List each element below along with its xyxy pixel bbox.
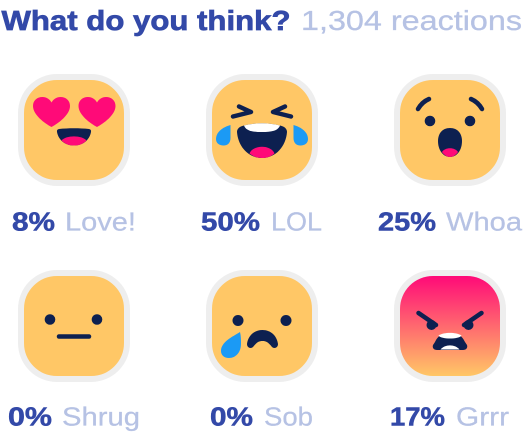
label: grrr (390, 402, 509, 432)
label: love (12, 206, 136, 236)
label: sob: Sob (264, 402, 313, 432)
label: love: 8% (12, 206, 55, 236)
icon: whoa face (397, 77, 503, 183)
panel: sob (209, 273, 315, 432)
label: love: Love! (65, 206, 136, 236)
icon: lol face (209, 77, 315, 183)
label: shrug: 0% (8, 402, 52, 432)
title: 1,304 reactions (301, 5, 522, 36)
label: whoa: Whoa (446, 206, 523, 236)
label: grrr: 17% (390, 402, 445, 432)
label: sob (210, 402, 313, 432)
label: whoa (378, 206, 523, 236)
panel: whoa (378, 77, 523, 236)
label: lol: LOL (271, 206, 322, 236)
label: whoa: 25% (378, 206, 436, 236)
icon: love face (21, 77, 127, 183)
label: shrug: Shrug (62, 402, 140, 432)
panel: lol (201, 77, 322, 236)
title (2, 5, 522, 36)
label: lol (201, 206, 322, 236)
icon: sob face (209, 273, 315, 379)
label: shrug (8, 402, 140, 432)
title: What do you think? (2, 5, 290, 36)
panel: love (12, 77, 136, 236)
icon: shrug face (21, 273, 127, 379)
label: grrr: Grrr (456, 402, 509, 432)
panel: shrug (8, 273, 140, 432)
panel: grrr (390, 273, 509, 432)
label: sob: 0% (210, 402, 253, 432)
icon: grrr face (397, 273, 503, 379)
label: lol: 50% (201, 206, 260, 236)
